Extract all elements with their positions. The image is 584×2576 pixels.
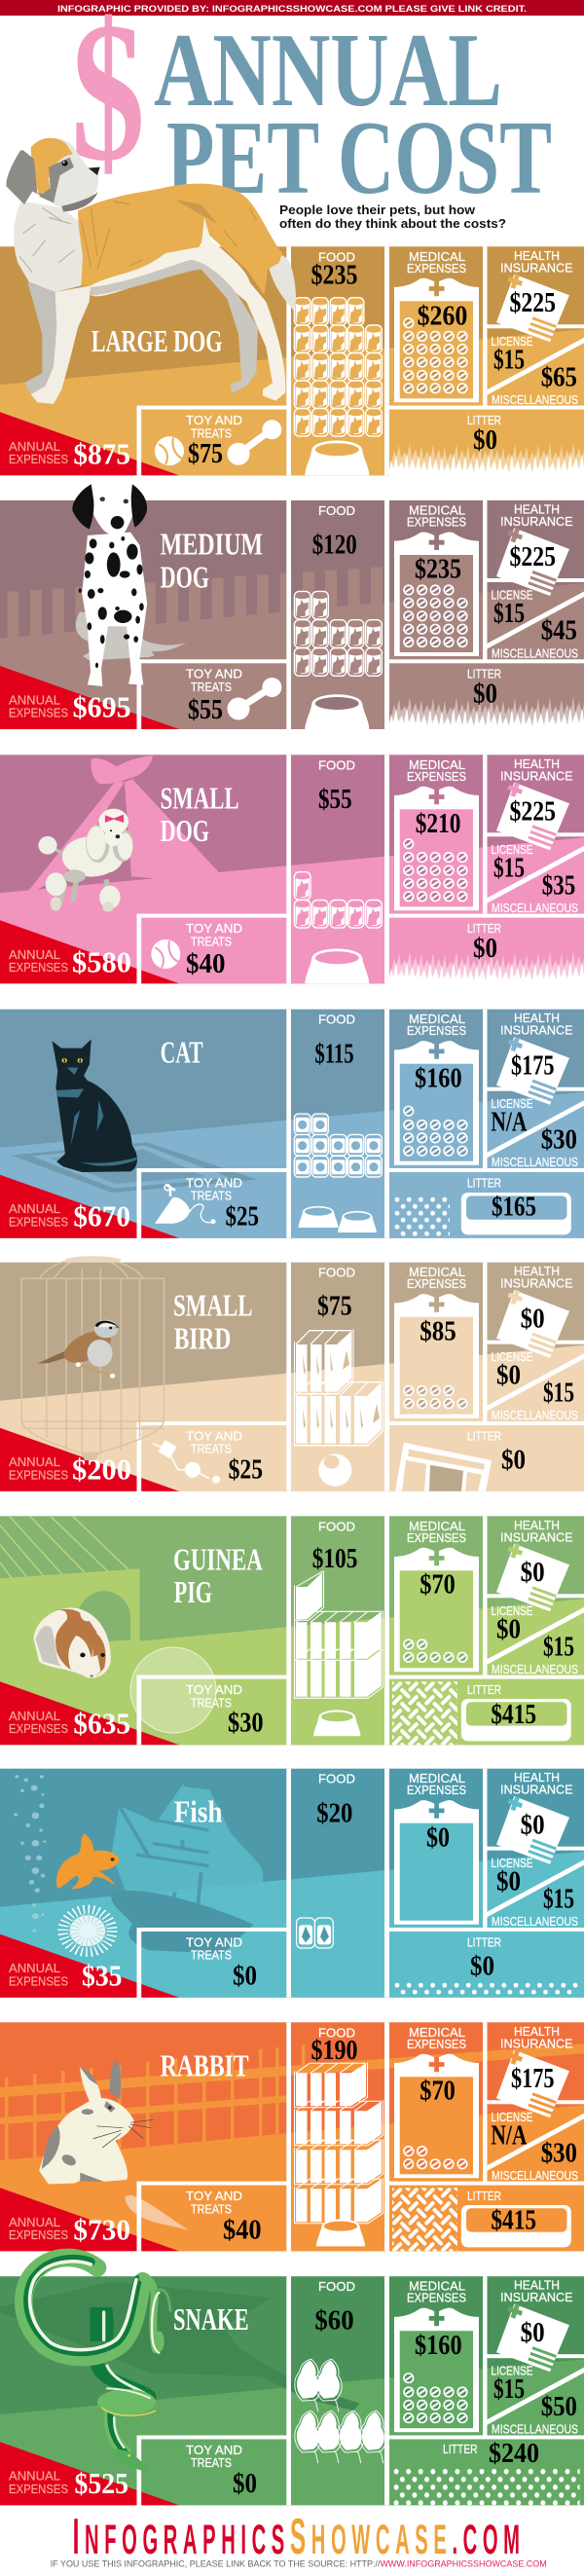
annual expenses: EXPENSES xyxy=(9,2228,68,2242)
food: $120 xyxy=(312,530,357,560)
toy and treats xyxy=(186,2190,262,2245)
food xyxy=(294,250,382,475)
food: $60 xyxy=(314,2306,354,2337)
miscellaneous: $15 xyxy=(543,1379,574,1409)
miscellaneous xyxy=(492,363,578,407)
medical expenses xyxy=(394,504,479,656)
annual expenses: EXPENSES xyxy=(9,961,68,975)
litter xyxy=(393,2439,580,2505)
miscellaneous: $30 xyxy=(541,2138,577,2168)
medical expenses: MEDICAL xyxy=(409,2026,465,2040)
panel: medium dog xyxy=(0,481,584,741)
health insurance: HEALTH xyxy=(514,757,560,771)
annual expenses: $35 xyxy=(82,1959,123,1993)
food: FOOD xyxy=(318,1267,355,1280)
pet name: PIG xyxy=(174,1574,212,1609)
medical expenses: MEDICAL xyxy=(409,1012,465,1026)
litter: $0 xyxy=(501,1445,526,1475)
illustration: st bernard dog xyxy=(6,138,296,404)
annual expenses: $670 xyxy=(73,1199,130,1233)
toy and treats: $25 xyxy=(229,1454,263,1485)
toy and treats xyxy=(151,922,242,979)
pet name: GUINEA xyxy=(173,1541,263,1576)
medical expenses xyxy=(394,1012,479,1165)
annual expenses: EXPENSES xyxy=(9,1215,68,1229)
medical expenses: EXPENSES xyxy=(407,1531,466,1545)
miscellaneous xyxy=(492,616,578,660)
annual expenses xyxy=(9,1199,130,1233)
toy and treats: $0 xyxy=(233,1961,257,1991)
toy and treats xyxy=(155,414,281,469)
pet name: Fish xyxy=(174,1794,223,1829)
food xyxy=(295,2280,386,2463)
annual expenses: ANNUAL xyxy=(9,440,60,454)
license xyxy=(491,843,533,883)
health insurance xyxy=(496,249,573,342)
annual expenses: ANNUAL xyxy=(9,1962,60,1975)
food: $75 xyxy=(317,1292,352,1322)
top banner: INFOGRAPHIC PROVIDED BY: INFOGRAPHICSSHOWCASE.COM PLEASE GIVE LINK CREDIT. xyxy=(57,4,527,15)
health insurance xyxy=(496,1771,573,1864)
license xyxy=(491,335,533,375)
illustration: bird in cage xyxy=(21,1256,164,1460)
health insurance: HEALTH xyxy=(514,1265,560,1278)
medical expenses: EXPENSES xyxy=(407,1277,466,1291)
food xyxy=(294,758,382,983)
food: FOOD xyxy=(318,1773,355,1786)
panel: rabbit xyxy=(0,2022,584,2252)
annual expenses: ANNUAL xyxy=(9,1455,60,1469)
miscellaneous xyxy=(492,870,578,915)
food xyxy=(294,504,382,729)
pet name: BIRD xyxy=(174,1321,231,1356)
annual expenses xyxy=(9,2466,128,2500)
miscellaneous: $45 xyxy=(541,616,577,646)
annual expenses: EXPENSES xyxy=(9,1974,68,1988)
annual expenses: $635 xyxy=(73,1706,130,1740)
medical expenses: $85 xyxy=(420,1317,456,1347)
litter xyxy=(394,1176,571,1237)
toy and treats: $40 xyxy=(186,949,226,979)
annual expenses xyxy=(9,690,131,724)
health insurance: $175 xyxy=(511,1050,555,1081)
pet name: DOG xyxy=(161,813,209,848)
miscellaneous xyxy=(492,1885,578,1929)
license: LICENSE xyxy=(491,588,533,602)
license: $0 xyxy=(496,1867,521,1897)
annual expenses: $580 xyxy=(72,944,131,978)
toy and treats: TREATS xyxy=(191,1190,232,1203)
illustration: dalmatian xyxy=(72,481,186,686)
litter: $0 xyxy=(473,680,497,710)
health insurance xyxy=(496,757,573,850)
illustration: goldfish, bubbles, sea urchin xyxy=(14,1775,119,1952)
toy and treats: TOY AND xyxy=(186,2190,242,2203)
hutch background xyxy=(0,1516,140,1657)
miscellaneous: $15 xyxy=(543,1885,574,1915)
toy and treats xyxy=(153,1429,263,1485)
health insurance: INSURANCE xyxy=(500,515,573,529)
litter: $240 xyxy=(489,2439,539,2469)
litter mat xyxy=(11,1142,257,1193)
medical expenses: $0 xyxy=(426,1823,450,1854)
license: LICENSE xyxy=(491,2111,533,2124)
food: $20 xyxy=(316,1799,352,1829)
license: LICENSE xyxy=(491,1857,533,1870)
toy and treats: $75 xyxy=(188,439,223,469)
medical expenses xyxy=(394,758,479,910)
medical expenses xyxy=(394,1772,479,1925)
medical expenses: MEDICAL xyxy=(409,250,465,264)
annual expenses: EXPENSES xyxy=(9,2483,68,2496)
toy and treats: TOY AND xyxy=(186,668,242,681)
toy and treats: TOY AND xyxy=(186,1429,242,1443)
toy and treats: TOY AND xyxy=(186,1935,242,1949)
medical expenses: MEDICAL xyxy=(409,758,465,772)
medical expenses: EXPENSES xyxy=(407,1024,466,1038)
annual expenses xyxy=(9,2212,130,2246)
miscellaneous xyxy=(492,1379,578,1422)
annual expenses: EXPENSES xyxy=(9,453,68,466)
pet name: SNAKE xyxy=(173,2301,249,2337)
toy and treats xyxy=(186,1935,257,1991)
food: FOOD xyxy=(318,758,355,772)
annual expenses: $875 xyxy=(73,436,130,470)
food xyxy=(297,1773,355,1948)
annual expenses: EXPENSES xyxy=(9,707,68,720)
annual expenses: $525 xyxy=(74,2466,128,2500)
pet name: SMALL xyxy=(161,781,239,816)
annual expenses: $730 xyxy=(73,2212,130,2246)
health insurance: HEALTH xyxy=(514,2279,560,2293)
food: $105 xyxy=(312,1544,357,1574)
litter: LITTER xyxy=(467,2190,501,2203)
medical expenses: $235 xyxy=(415,554,461,584)
annual expenses: $200 xyxy=(72,1453,131,1487)
health insurance: INSURANCE xyxy=(500,1530,573,1544)
hamster ball xyxy=(130,1647,216,1733)
pet name: RABBIT xyxy=(161,2047,249,2082)
license xyxy=(491,1350,533,1391)
toy and treats: $0 xyxy=(233,2469,257,2499)
health insurance: $0 xyxy=(521,2318,545,2348)
medical expenses xyxy=(394,1266,479,1418)
background shadow xyxy=(0,2282,359,2410)
medical expenses: MEDICAL xyxy=(409,2280,465,2294)
miscellaneous xyxy=(492,1632,578,1676)
food: $115 xyxy=(314,1040,354,1070)
medical expenses: $160 xyxy=(415,2331,462,2361)
health insurance xyxy=(496,1012,573,1105)
health insurance: $0 xyxy=(521,1304,545,1334)
medical expenses: $70 xyxy=(420,2077,456,2107)
toy and treats: $55 xyxy=(188,695,223,725)
food: $55 xyxy=(318,785,352,815)
medical expenses: EXPENSES xyxy=(407,516,466,530)
health insurance: INSURANCE xyxy=(500,2291,573,2304)
health insurance: HEALTH xyxy=(514,2025,560,2039)
toy and treats: TREATS xyxy=(191,681,232,694)
license: N/A xyxy=(491,2120,528,2151)
pet name: LARGE DOG xyxy=(91,323,223,358)
food: FOOD xyxy=(318,2280,355,2294)
health insurance: $175 xyxy=(511,2064,555,2094)
litter: $415 xyxy=(491,2205,536,2235)
pet name: CAT xyxy=(161,1035,203,1070)
food: $190 xyxy=(311,2036,358,2066)
license: LICENSE xyxy=(491,843,533,857)
illustration: rabbit xyxy=(39,2061,154,2184)
toy and treats: $30 xyxy=(228,1708,264,1738)
health insurance: HEALTH xyxy=(514,502,560,516)
litter: LITTER xyxy=(467,1683,501,1697)
toy and treats: TREATS xyxy=(191,2202,232,2216)
panel: small bird xyxy=(0,1256,584,1491)
litter: $165 xyxy=(492,1192,536,1222)
license xyxy=(491,1604,533,1644)
medical expenses: MEDICAL xyxy=(409,1266,465,1279)
medical expenses: MEDICAL xyxy=(409,1520,465,1533)
medical expenses xyxy=(394,1520,479,1672)
toy and treats: TOY AND xyxy=(186,414,242,427)
license xyxy=(491,2365,533,2405)
license: $0 xyxy=(496,1614,521,1644)
medical expenses: EXPENSES xyxy=(407,770,466,784)
panel: fish xyxy=(0,1769,584,1998)
litter: LITTER xyxy=(467,1176,501,1190)
litter: $0 xyxy=(473,934,497,964)
medical expenses xyxy=(394,250,479,402)
panel: guinea pig xyxy=(0,1516,584,1746)
toy and treats: TREATS xyxy=(191,1696,232,1710)
toy and treats xyxy=(155,1176,259,1232)
annual expenses: ANNUAL xyxy=(9,693,60,707)
license: N/A xyxy=(491,1108,528,1138)
toy and treats: TOY AND xyxy=(186,2444,242,2457)
annual expenses: EXPENSES xyxy=(9,1468,68,1482)
annual expenses xyxy=(9,944,131,978)
health insurance: $0 xyxy=(521,1558,545,1588)
miscellaneous xyxy=(492,1125,578,1169)
litter xyxy=(392,2188,571,2251)
medical expenses: EXPENSES xyxy=(407,1784,466,1797)
license: LICENSE xyxy=(491,1350,533,1364)
intro text: People love their pets, but how xyxy=(279,202,476,217)
miscellaneous: $30 xyxy=(541,1125,577,1156)
license: LICENSE xyxy=(491,1604,533,1618)
medical expenses: $210 xyxy=(416,809,460,839)
annual expenses xyxy=(9,1959,123,1993)
food xyxy=(294,1013,382,1233)
pet name xyxy=(173,1288,253,1356)
medical expenses: $70 xyxy=(420,1570,456,1601)
license: LICENSE xyxy=(491,1097,533,1111)
license: LICENSE xyxy=(491,335,533,349)
annual expenses: $695 xyxy=(73,690,131,724)
medical expenses: $260 xyxy=(418,301,467,331)
toy and treats: TOY AND xyxy=(186,1176,242,1190)
medical expenses: EXPENSES xyxy=(407,262,466,276)
license xyxy=(491,1097,533,1138)
medical expenses xyxy=(394,2280,479,2432)
toy and treats xyxy=(186,2444,257,2499)
toy and treats: TREATS xyxy=(191,1443,232,1456)
pet name: SMALL xyxy=(173,1288,253,1323)
background fence xyxy=(0,2043,584,2168)
illustration: green snake xyxy=(23,2258,170,2471)
license: $15 xyxy=(493,599,525,629)
litter xyxy=(389,922,584,995)
license: LICENSE xyxy=(491,2365,533,2378)
litter: LITTER xyxy=(467,414,501,427)
health insurance: HEALTH xyxy=(514,1519,560,1532)
food: FOOD xyxy=(318,504,355,518)
litter: $415 xyxy=(491,1700,536,1730)
miscellaneous: $50 xyxy=(541,2392,577,2422)
toy and treats: TREATS xyxy=(191,935,232,948)
health insurance xyxy=(496,1265,573,1358)
license: $15 xyxy=(493,345,525,375)
litter xyxy=(392,1681,571,1745)
health insurance xyxy=(496,502,573,596)
medical expenses: $160 xyxy=(415,1064,462,1094)
litter: LITTER xyxy=(443,2443,478,2456)
health insurance: HEALTH xyxy=(514,1771,560,1785)
litter: LITTER xyxy=(467,922,501,936)
annual expenses: ANNUAL xyxy=(9,2470,60,2484)
litter: LITTER xyxy=(467,1935,501,1949)
license xyxy=(491,1857,533,1897)
health insurance: $225 xyxy=(510,542,556,572)
toy and treats xyxy=(130,1647,264,1738)
title xyxy=(71,0,552,216)
illustration: poodle xyxy=(38,809,133,912)
toy and treats: $40 xyxy=(223,2215,262,2245)
illustration: guinea pig xyxy=(33,1608,111,1678)
license: $15 xyxy=(493,853,525,883)
food xyxy=(294,1267,383,1487)
health insurance: $225 xyxy=(510,796,556,827)
health insurance: INSURANCE xyxy=(500,1024,573,1038)
top banner xyxy=(0,0,584,16)
health insurance: $225 xyxy=(510,288,556,318)
annual expenses: ANNUAL xyxy=(9,948,60,962)
annual expenses: ANNUAL xyxy=(9,1202,60,1216)
toy and treats: TOY AND xyxy=(186,922,242,936)
medical expenses xyxy=(394,2026,479,2178)
food: FOOD xyxy=(318,1520,355,1533)
health insurance: $0 xyxy=(521,1810,545,1840)
miscellaneous xyxy=(492,2138,578,2183)
litter: LITTER xyxy=(467,668,501,681)
health insurance xyxy=(496,1519,573,1611)
health insurance xyxy=(496,2025,573,2117)
annual expenses xyxy=(9,436,130,470)
toy and treats: $25 xyxy=(226,1201,259,1232)
sunken ship background xyxy=(111,1772,263,1954)
toy and treats: TREATS xyxy=(191,426,232,440)
pet name xyxy=(161,526,263,594)
annual expenses: ANNUAL xyxy=(9,2216,60,2229)
food xyxy=(294,2026,383,2246)
toy and treats: TREATS xyxy=(191,1949,232,1963)
food: $235 xyxy=(311,261,358,291)
medical expenses: MEDICAL xyxy=(409,504,465,518)
carrot xyxy=(125,2195,188,2229)
license: $15 xyxy=(493,2374,525,2405)
miscellaneous: $15 xyxy=(543,1632,574,1662)
toy and treats xyxy=(186,668,281,725)
health insurance: HEALTH xyxy=(514,249,560,263)
health insurance: INSURANCE xyxy=(500,2037,573,2050)
intro text xyxy=(279,202,506,231)
license: $0 xyxy=(496,1361,521,1391)
medical expenses: EXPENSES xyxy=(407,2038,466,2051)
license xyxy=(491,588,533,629)
illustration: black cat xyxy=(53,1039,138,1172)
litter xyxy=(389,414,584,487)
panel: small dog xyxy=(0,754,584,995)
food xyxy=(294,1520,383,1736)
background ribbon and bow xyxy=(24,755,220,896)
health insurance: INSURANCE xyxy=(500,261,573,275)
panel: snake xyxy=(0,2258,584,2506)
miscellaneous: $35 xyxy=(542,870,575,901)
toy and treats: TOY AND xyxy=(186,1683,242,1697)
intro text: often do they think about the costs? xyxy=(279,216,506,231)
health insurance: INSURANCE xyxy=(500,1277,573,1291)
pet name xyxy=(161,781,239,848)
litter xyxy=(389,668,584,741)
annual expenses xyxy=(9,1706,130,1740)
panel: cat xyxy=(0,1010,584,1238)
annual expenses xyxy=(9,1453,131,1487)
health insurance: INSURANCE xyxy=(500,769,573,783)
background fence xyxy=(8,568,383,646)
license xyxy=(491,2111,533,2151)
food: FOOD xyxy=(318,250,355,264)
toy and treats: TREATS xyxy=(191,2456,232,2470)
health insurance xyxy=(496,2279,573,2372)
litter: $0 xyxy=(470,1951,494,1981)
miscellaneous: $65 xyxy=(541,363,577,393)
litter xyxy=(394,1935,579,1996)
litter xyxy=(395,1429,526,1491)
litter: LITTER xyxy=(467,1429,501,1443)
medical expenses: MEDICAL xyxy=(409,1772,465,1785)
miscellaneous xyxy=(492,2392,578,2437)
food: FOOD xyxy=(318,1013,355,1027)
health insurance: HEALTH xyxy=(514,1012,560,1025)
litter: $0 xyxy=(473,425,497,456)
annual expenses: EXPENSES xyxy=(9,1722,68,1736)
pet name xyxy=(173,1541,263,1609)
medical expenses: EXPENSES xyxy=(407,2292,466,2305)
health insurance: INSURANCE xyxy=(500,1784,573,1797)
pet name: DOG xyxy=(161,559,209,594)
food: FOOD xyxy=(318,2026,355,2040)
panel: large dog xyxy=(0,138,584,487)
footer source note: IF YOU USE THIS INFOGRAPHIC, PLEASE LINK BACK TO THE SOURCE: HTTP://WWW.INFOGRAPHICSSHOWCASE.COM xyxy=(51,2558,547,2568)
pet name: MEDIUM xyxy=(161,526,263,561)
annual expenses: ANNUAL xyxy=(9,1710,60,1723)
